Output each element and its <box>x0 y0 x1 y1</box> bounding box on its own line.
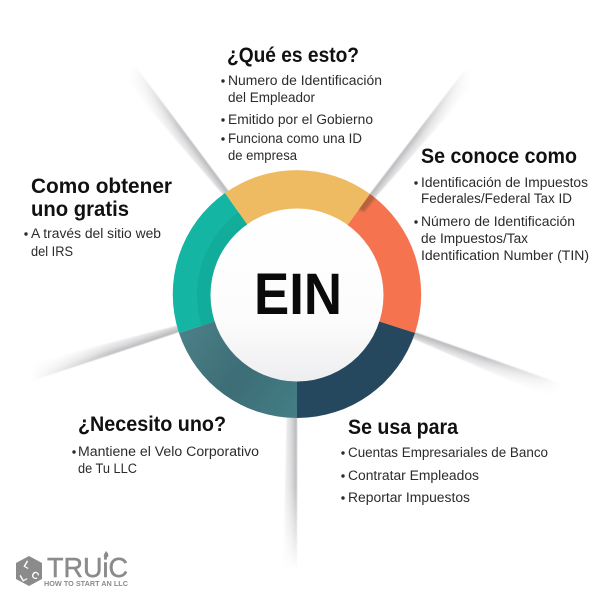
text block: how to get one: uno gratis <box>31 198 129 221</box>
text block: used for: Cuentas Empresariales de Banco <box>348 445 548 460</box>
ring segment: orange <box>348 194 422 333</box>
text block: also known as: Número de Identificación <box>421 214 575 229</box>
icon: LLC cube: L <box>18 572 29 585</box>
text block: do I need one: Mantiene el Velo Corporativo <box>78 444 259 459</box>
logo: TRUiC <box>16 551 129 588</box>
text block: also known as: Identificación de Impuestos <box>421 175 588 190</box>
text block: do I need one: ¿Necesito uno? <box>78 413 226 436</box>
spoke: lower left <box>42 326 179 376</box>
text block: how to get one: del IRS <box>31 244 73 259</box>
ring segment: teal <box>172 193 248 333</box>
text block: do I need one: de Tu LLC <box>78 461 137 476</box>
spoke: top left <box>140 75 229 198</box>
ring segment: navy <box>297 295 415 418</box>
donut ring <box>173 170 421 418</box>
logo tagline: HOW TO START AN LLC <box>44 579 129 588</box>
spoke: bottom <box>285 418 298 558</box>
center label: EIN <box>254 262 342 327</box>
text block: also known as <box>414 145 589 263</box>
text block: what is it: Emitido por el Gobierno <box>228 112 373 127</box>
text block: how to get one: Como obtener <box>31 175 172 198</box>
text block: what is it: del Empleador <box>228 90 315 105</box>
text block: how to get one <box>24 175 172 259</box>
text block: do I need one <box>72 413 259 476</box>
icon: logo flame <box>104 551 108 557</box>
spoke: top right <box>370 78 460 198</box>
text block: what is it: Funciona como una ID <box>228 131 362 146</box>
text block: also known as: Federales/Federal Tax ID <box>421 191 572 206</box>
ring segment: gold <box>225 170 370 295</box>
text block: also known as: de Impuestos/Tax <box>421 231 528 246</box>
text block: how to get one: A través del sitio web <box>31 226 161 241</box>
icon: LLC cube: L <box>21 559 32 572</box>
text block: used for: Reportar Impuestos <box>348 490 470 505</box>
text block: also known as: Se conoce como <box>421 145 577 168</box>
text block: used for: Se usa para <box>348 416 458 439</box>
text block: used for: Contratar Empleados <box>348 468 479 483</box>
text block: also known as: Identification Number (TIN) <box>421 248 589 263</box>
text block: what is it <box>221 44 382 163</box>
text block: used for <box>341 416 548 505</box>
ring segment: slate teal <box>179 295 297 418</box>
icon: LLC cube <box>16 556 42 586</box>
logo wordmark: TRUiC <box>47 552 128 583</box>
text block: what is it: ¿Qué es esto? <box>227 44 359 67</box>
center circle <box>210 208 384 382</box>
icon: LLC cube: C <box>29 570 41 583</box>
spoke: lower right <box>406 330 550 382</box>
text block: what is it: Numero de Identificación <box>228 73 382 88</box>
text block: what is it: de empresa <box>228 148 297 163</box>
